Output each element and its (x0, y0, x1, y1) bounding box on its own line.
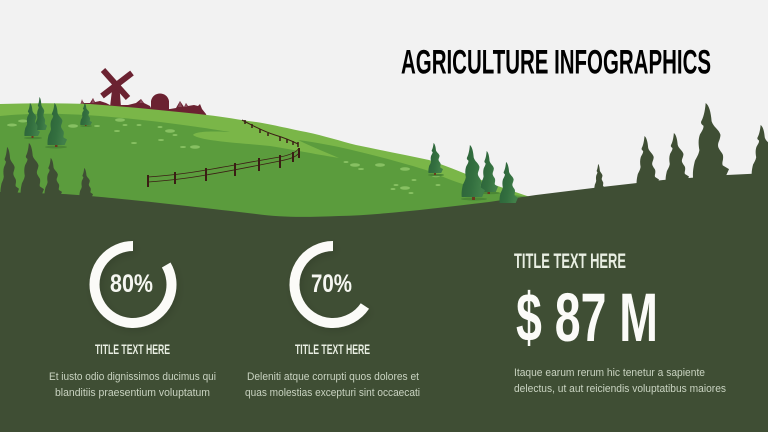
dark foreground ground (0, 173, 768, 432)
panel: 80% stat (49, 246, 216, 399)
heading: 70% stat: TITLE TEXT HERE (295, 341, 370, 357)
text block: 80% stat: blanditiis praesentium voluptatum (55, 387, 210, 399)
tree foliage (428, 143, 498, 197)
green trees: right group (428, 143, 500, 200)
value: $ 87 M: $ 87 M (516, 279, 658, 356)
dark silhouette trees (0, 103, 768, 198)
panel: revenue stat (514, 250, 726, 395)
value: 70%: 70% (311, 270, 352, 298)
heading: revenue: TITLE TEXT HERE (514, 250, 626, 273)
text block: 70% stat (245, 371, 420, 399)
text block: 70% stat: Deleniti atque corrupti quos dolores et (247, 371, 419, 383)
illustration: farm on the horizon (80, 68, 207, 117)
front green tree (499, 162, 518, 203)
donut: 70% (294, 246, 365, 323)
hill: light green (0, 103, 530, 240)
ground strip (80, 98, 207, 117)
text block: revenue: Itaque earum rerum hic tenetur a sapiente (514, 367, 705, 379)
text block: 70% stat: quas molestias excepturi sint occaecati (245, 387, 420, 399)
hill: mid green (0, 114, 529, 240)
text block: 80% stat: Et iusto odio dignissimos ducimus qui (49, 371, 216, 383)
text block: revenue (514, 367, 726, 395)
panel: 70% stat (245, 246, 420, 399)
icon: windmill (100, 68, 134, 107)
tree foliage (24, 97, 92, 145)
icon: barn (151, 94, 169, 111)
text block: 80% stat (49, 371, 216, 399)
grass patches (7, 118, 440, 194)
fence: back section (242, 120, 298, 147)
fence: front section (148, 148, 299, 187)
trunks (434, 172, 490, 200)
green trees: left group (24, 97, 92, 148)
text block: revenue: delectus, ut aut reiciendis voluptatibus maiores (514, 383, 726, 395)
value: 80%: 80% (110, 270, 153, 298)
donut: 80% (95, 246, 172, 323)
trunks (32, 124, 86, 147)
tree shadows (428, 174, 500, 200)
small background trees (80, 98, 188, 107)
heading: 80% stat: TITLE TEXT HERE (95, 341, 170, 357)
tree shadows (24, 125, 92, 148)
